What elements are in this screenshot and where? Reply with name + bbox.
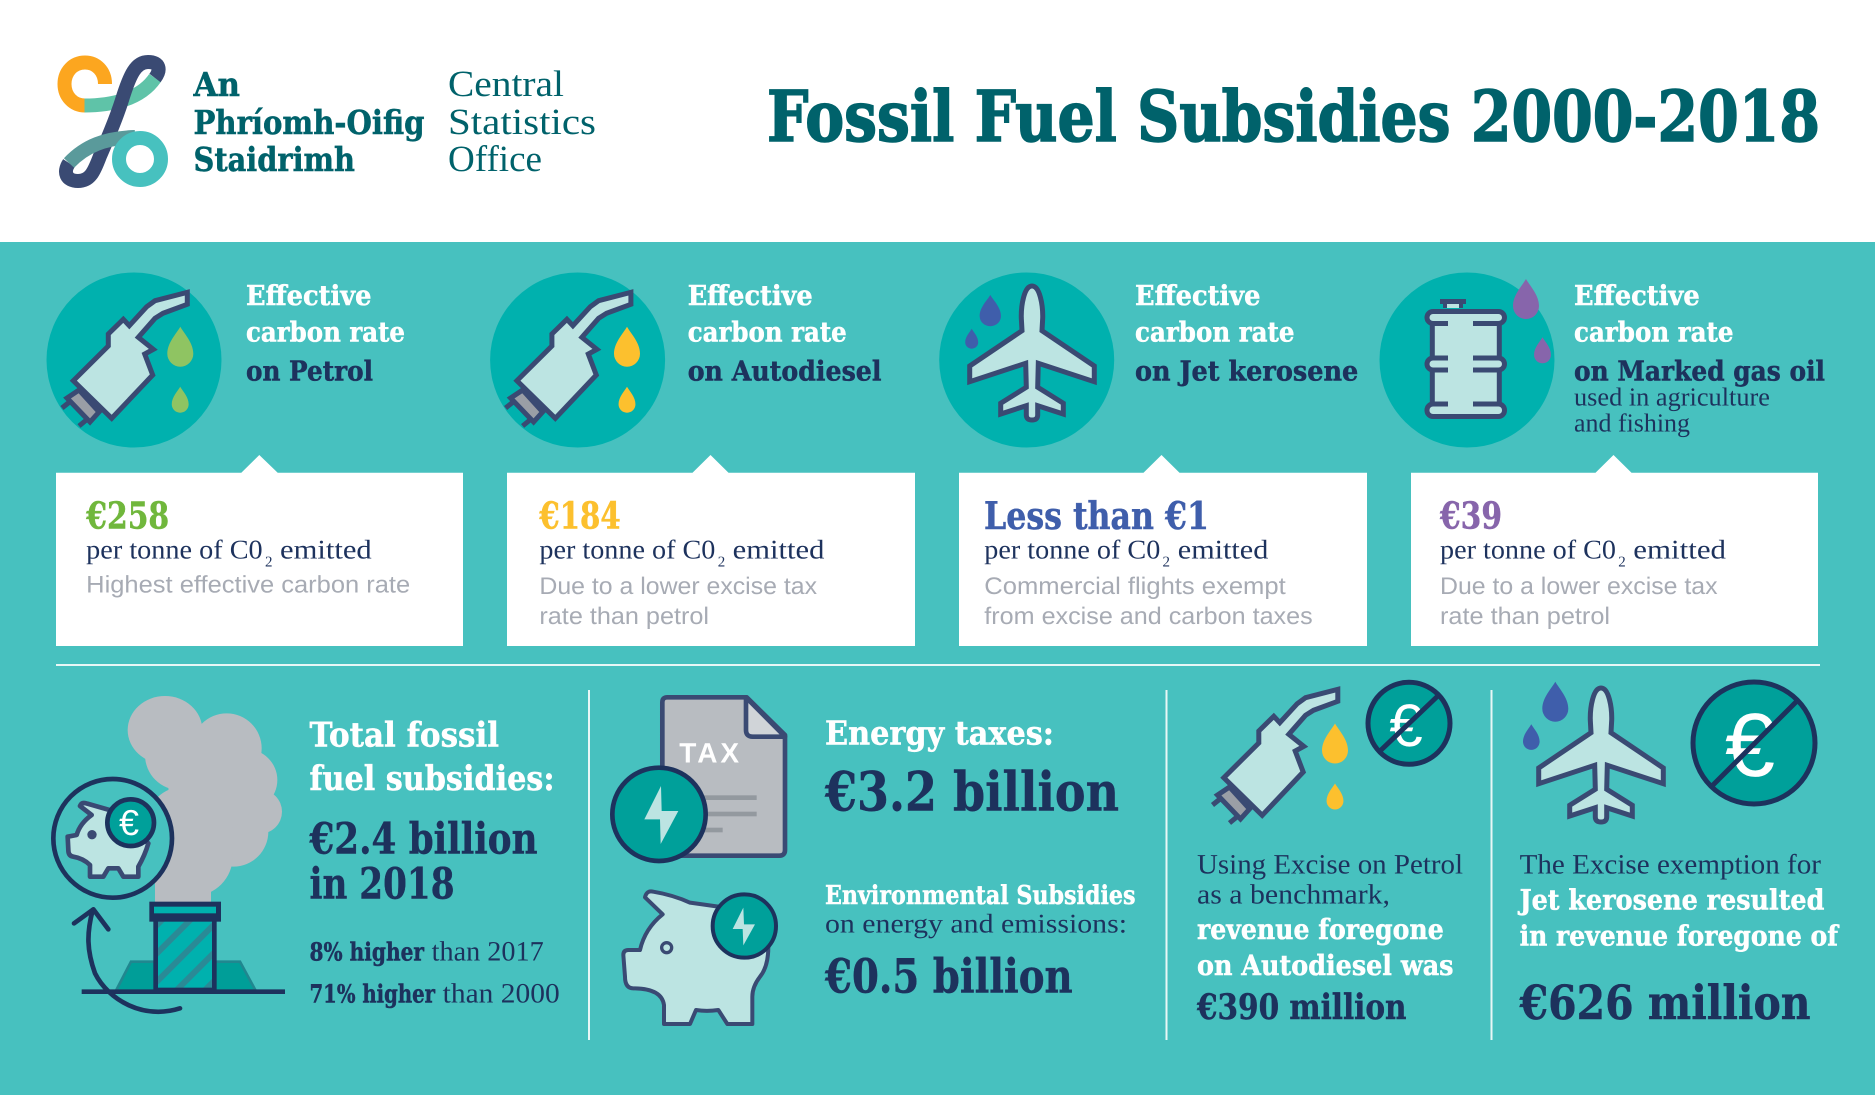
card: autodiesel rate: Due to a lower excise tax — [539, 573, 817, 600]
logo Irish name: Phríomh-Oifig — [194, 103, 424, 142]
text: autodiesel revenue foregone: Using Excise on Petrol — [1197, 849, 1463, 880]
icon: oil barrel — [1380, 272, 1554, 448]
icon: petrol nozzle — [46, 272, 222, 448]
heading: marked gas oil: carbon rate — [1574, 317, 1734, 349]
card: jet kerosene rate: 2 — [1162, 555, 1170, 571]
logo Irish name — [193, 65, 424, 179]
logo English name — [448, 64, 596, 180]
heading: petrol — [246, 280, 405, 388]
text: energy taxes — [824, 713, 1119, 824]
comparison lines: than 2017 — [432, 937, 544, 968]
heading: total subsidies — [310, 716, 554, 799]
text: jet kerosene revenue foregone: Jet kerosene resulted — [1517, 883, 1824, 916]
icon: plane with no-euro sign — [1523, 682, 1815, 822]
card: petrol rate: emitted — [280, 534, 372, 564]
text: total subsidies — [309, 716, 560, 1010]
heading: jet kerosene: Effective — [1135, 280, 1260, 312]
card: marked gas oil rate: per tonne of C0 — [1440, 534, 1616, 564]
card: petrol rate: 2 — [265, 555, 272, 571]
teal background panel — [0, 242, 1875, 1095]
logo: Central Statistics Office — [64, 62, 596, 181]
card: jet kerosene rate: emitted — [1178, 534, 1269, 564]
card: marked gas oil rate: €39 — [1439, 493, 1502, 537]
note: agriculture and fishing: and fishing — [1574, 409, 1690, 438]
text: environmental subsidies: Environmental Subsidies — [825, 881, 1136, 911]
heading: autodiesel: carbon rate — [688, 317, 847, 349]
icon: plane — [939, 272, 1114, 448]
no-euro badge: € — [1389, 692, 1423, 759]
no-euro badge — [1693, 682, 1815, 804]
panel: marked gas oil — [1380, 272, 1825, 646]
card: jet kerosene rate: per tonne of C0 — [984, 534, 1160, 564]
euro on coin: € — [119, 802, 139, 843]
logo mark — [64, 62, 161, 181]
card: jet kerosene rate — [959, 455, 1367, 646]
logo English name: Office — [448, 139, 542, 180]
no-euro badge — [1368, 682, 1450, 764]
heading: marked gas oil — [1574, 280, 1825, 388]
note: agriculture and fishing — [1574, 383, 1770, 438]
panel: autodiesel — [490, 272, 915, 646]
text: autodiesel revenue foregone — [1196, 849, 1463, 1028]
heading: autodiesel: on Autodiesel — [688, 356, 882, 388]
card: petrol rate: Highest effective carbon rate — [86, 571, 410, 598]
heading: marked gas oil: Effective — [1574, 280, 1700, 312]
card: autodiesel rate — [507, 455, 915, 646]
text: energy taxes: Energy taxes: — [825, 713, 1054, 752]
card: autodiesel rate: 2 — [718, 555, 725, 571]
heading: petrol: on Petrol — [246, 356, 373, 388]
text: jet kerosene revenue foregone: €626 million — [1519, 976, 1811, 1031]
piggy bank in ring — [53, 779, 172, 898]
arrow — [74, 909, 180, 1012]
comparison lines: 71% higher — [310, 980, 436, 1009]
logo Irish name: An — [193, 65, 240, 104]
icon: nozzle with no-euro sign — [1212, 682, 1450, 823]
card: autodiesel rate: emitted — [733, 534, 825, 564]
heading: jet kerosene — [1135, 280, 1358, 388]
figure: 2.4 billion: in 2018 — [310, 859, 454, 909]
heading: petrol: Effective — [246, 280, 372, 312]
smoke — [128, 696, 282, 903]
card: autodiesel rate: €184 — [539, 493, 621, 537]
text: autodiesel revenue foregone: €390 million — [1196, 987, 1406, 1028]
card: autodiesel rate: rate than petrol — [539, 603, 709, 630]
text: jet kerosene revenue foregone — [1517, 849, 1840, 1031]
card: autodiesel rate: per tonne of C0 — [539, 534, 715, 564]
comparison lines — [310, 937, 560, 1010]
icon: piggy bank with energy coin — [623, 891, 776, 1024]
text: jet kerosene revenue foregone: The Excise exemption for — [1520, 849, 1822, 880]
heading: marked gas oil: on Marked gas oil — [1574, 356, 1825, 388]
heading: jet kerosene: carbon rate — [1135, 317, 1294, 349]
heading: total subsidies: fuel subsidies: — [310, 759, 554, 799]
icon: autodiesel nozzle — [490, 272, 665, 448]
illustration: smokestack with piggy bank — [53, 696, 285, 1012]
card: jet kerosene rate: Commercial flights exempt — [984, 573, 1286, 600]
heading: petrol: carbon rate — [246, 317, 405, 349]
factory chimney — [82, 902, 285, 992]
card: petrol rate: €258 — [85, 493, 169, 537]
heading: autodiesel: Effective — [688, 280, 813, 312]
text: environmental subsidies — [824, 881, 1136, 1005]
icon: tax document with energy badge — [612, 697, 785, 861]
text: environmental subsidies: on energy and emissions: — [825, 908, 1127, 938]
logo Irish name: Staidrimh — [194, 140, 355, 179]
header band — [0, 0, 1875, 242]
comparison lines: than 2000 — [443, 979, 560, 1010]
card: petrol rate: per tonne of C0 — [86, 534, 263, 564]
card: marked gas oil rate — [1411, 455, 1818, 646]
text: autodiesel revenue foregone: as a benchmark, — [1197, 879, 1390, 910]
heading: autodiesel — [688, 280, 882, 388]
note: agriculture and fishing: used in agriculture — [1574, 383, 1770, 412]
panel: jet kerosene — [939, 272, 1367, 646]
text: autodiesel revenue foregone: revenue foregone — [1197, 913, 1444, 946]
text: autodiesel revenue foregone: on Autodiesel was — [1197, 949, 1454, 982]
heading: jet kerosene: on Jet kerosene — [1135, 356, 1358, 388]
card: jet kerosene rate: Less than €1 — [984, 493, 1209, 538]
card: marked gas oil rate: rate than petrol — [1440, 603, 1610, 630]
figure: 2.4 billion: €2.4 billion — [309, 814, 538, 864]
card: marked gas oil rate: emitted — [1633, 534, 1727, 564]
text: energy taxes: €3.2 billion — [824, 760, 1119, 824]
text: environmental subsidies: €0.5 billion — [824, 950, 1073, 1005]
card: marked gas oil rate: Due to a lower excise tax — [1440, 573, 1718, 600]
panel: petrol — [46, 272, 463, 646]
figure: 2.4 billion — [309, 814, 538, 909]
card: petrol rate — [56, 455, 463, 646]
heading: total subsidies: Total fossil — [310, 716, 499, 756]
icon: tax document with energy badge: TAX — [679, 738, 739, 769]
card: marked gas oil rate: 2 — [1618, 555, 1626, 571]
card: jet kerosene rate: from excise and carbon taxes — [984, 603, 1313, 630]
no-euro badge: € — [1725, 696, 1775, 796]
logo English name: Statistics — [448, 102, 596, 143]
logo English name: Central — [448, 64, 564, 105]
comparison lines: 8% higher — [310, 938, 425, 967]
text: jet kerosene revenue foregone: in revenue foregone of — [1520, 920, 1840, 953]
